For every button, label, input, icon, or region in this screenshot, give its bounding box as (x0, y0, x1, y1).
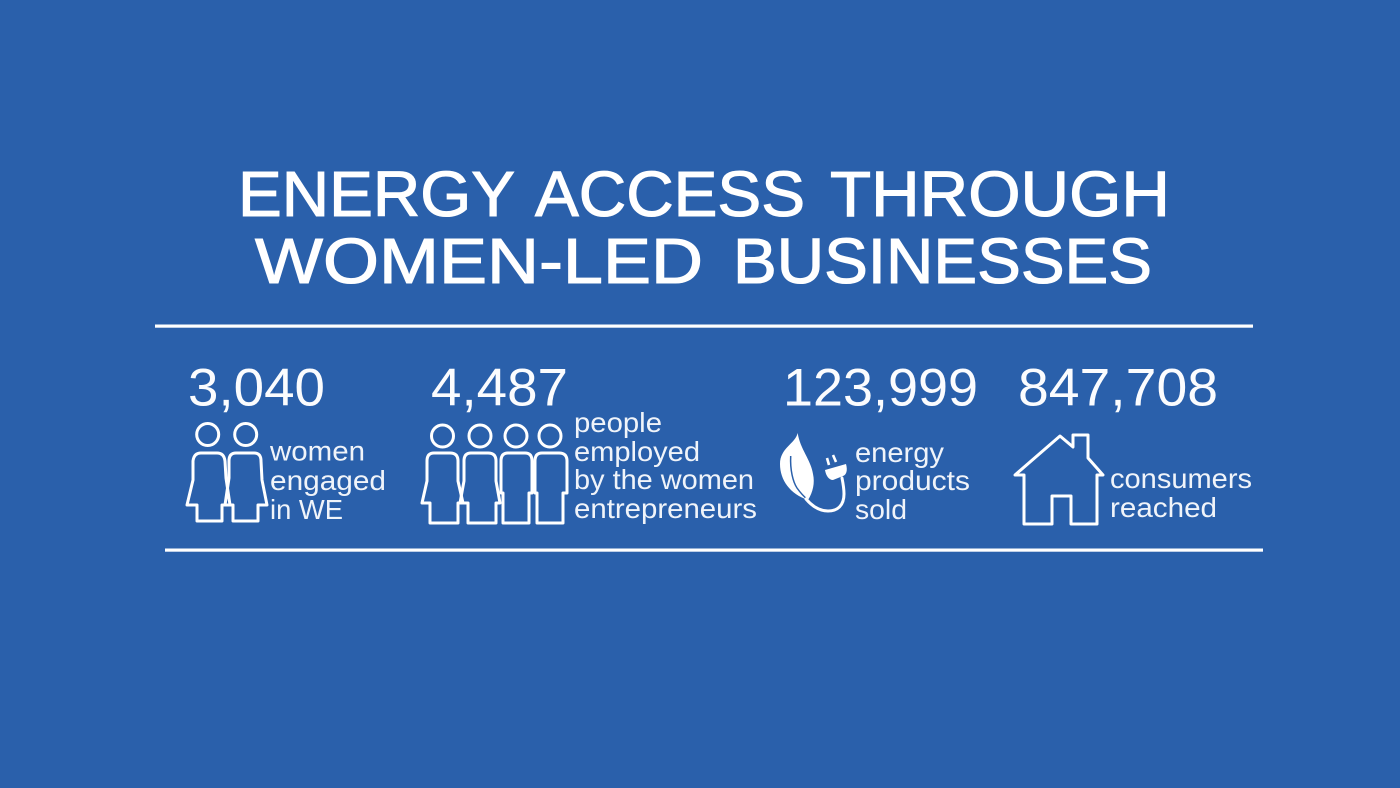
stat: energy products sold (780, 358, 978, 525)
label: women engaged in WE: in WE (270, 494, 343, 525)
number: 123,999: 123,999 (783, 358, 978, 418)
title: WOMEN-LED (255, 225, 703, 297)
label: people employed by the women entrepreneurs: by the women (574, 464, 754, 495)
stat: women engaged (187, 358, 386, 525)
label: people employed by the women entrepreneurs (574, 407, 757, 524)
label: women engaged in WE (269, 436, 386, 525)
label: people employed by the women entrepreneurs: entrepreneurs (574, 493, 757, 524)
label: women engaged in WE: women (269, 436, 365, 466)
label: consumers reached: consumers (1110, 463, 1252, 494)
stat: consumers reached (1015, 358, 1252, 524)
number: 3,040: 3,040 (188, 358, 325, 418)
label: consumers reached: reached (1110, 492, 1217, 523)
label: energy products sold (855, 437, 970, 525)
title: ACCESS (535, 158, 805, 230)
label: energy products sold: sold (855, 494, 907, 525)
icon: leaf and plug (780, 433, 847, 511)
title (238, 158, 1170, 297)
label: people employed by the women entrepreneurs: employed (574, 436, 700, 467)
label: consumers reached (1110, 463, 1252, 523)
number: 847,708: 847,708 (1018, 358, 1218, 418)
icon: two women (187, 424, 267, 521)
title: ENERGY (238, 158, 515, 230)
label: people employed by the women entrepreneurs: people (574, 407, 662, 438)
number: 4,487: 4,487 (431, 358, 568, 418)
label: energy products sold: energy (855, 437, 944, 468)
icon: four people (422, 425, 567, 523)
title: BUSINESSES (733, 225, 1152, 297)
label: energy products sold: products (855, 465, 970, 496)
icon: house (1015, 435, 1103, 524)
title: THROUGH (830, 158, 1170, 230)
label: women engaged in WE: engaged (270, 465, 386, 496)
stat: people employed (422, 358, 757, 524)
